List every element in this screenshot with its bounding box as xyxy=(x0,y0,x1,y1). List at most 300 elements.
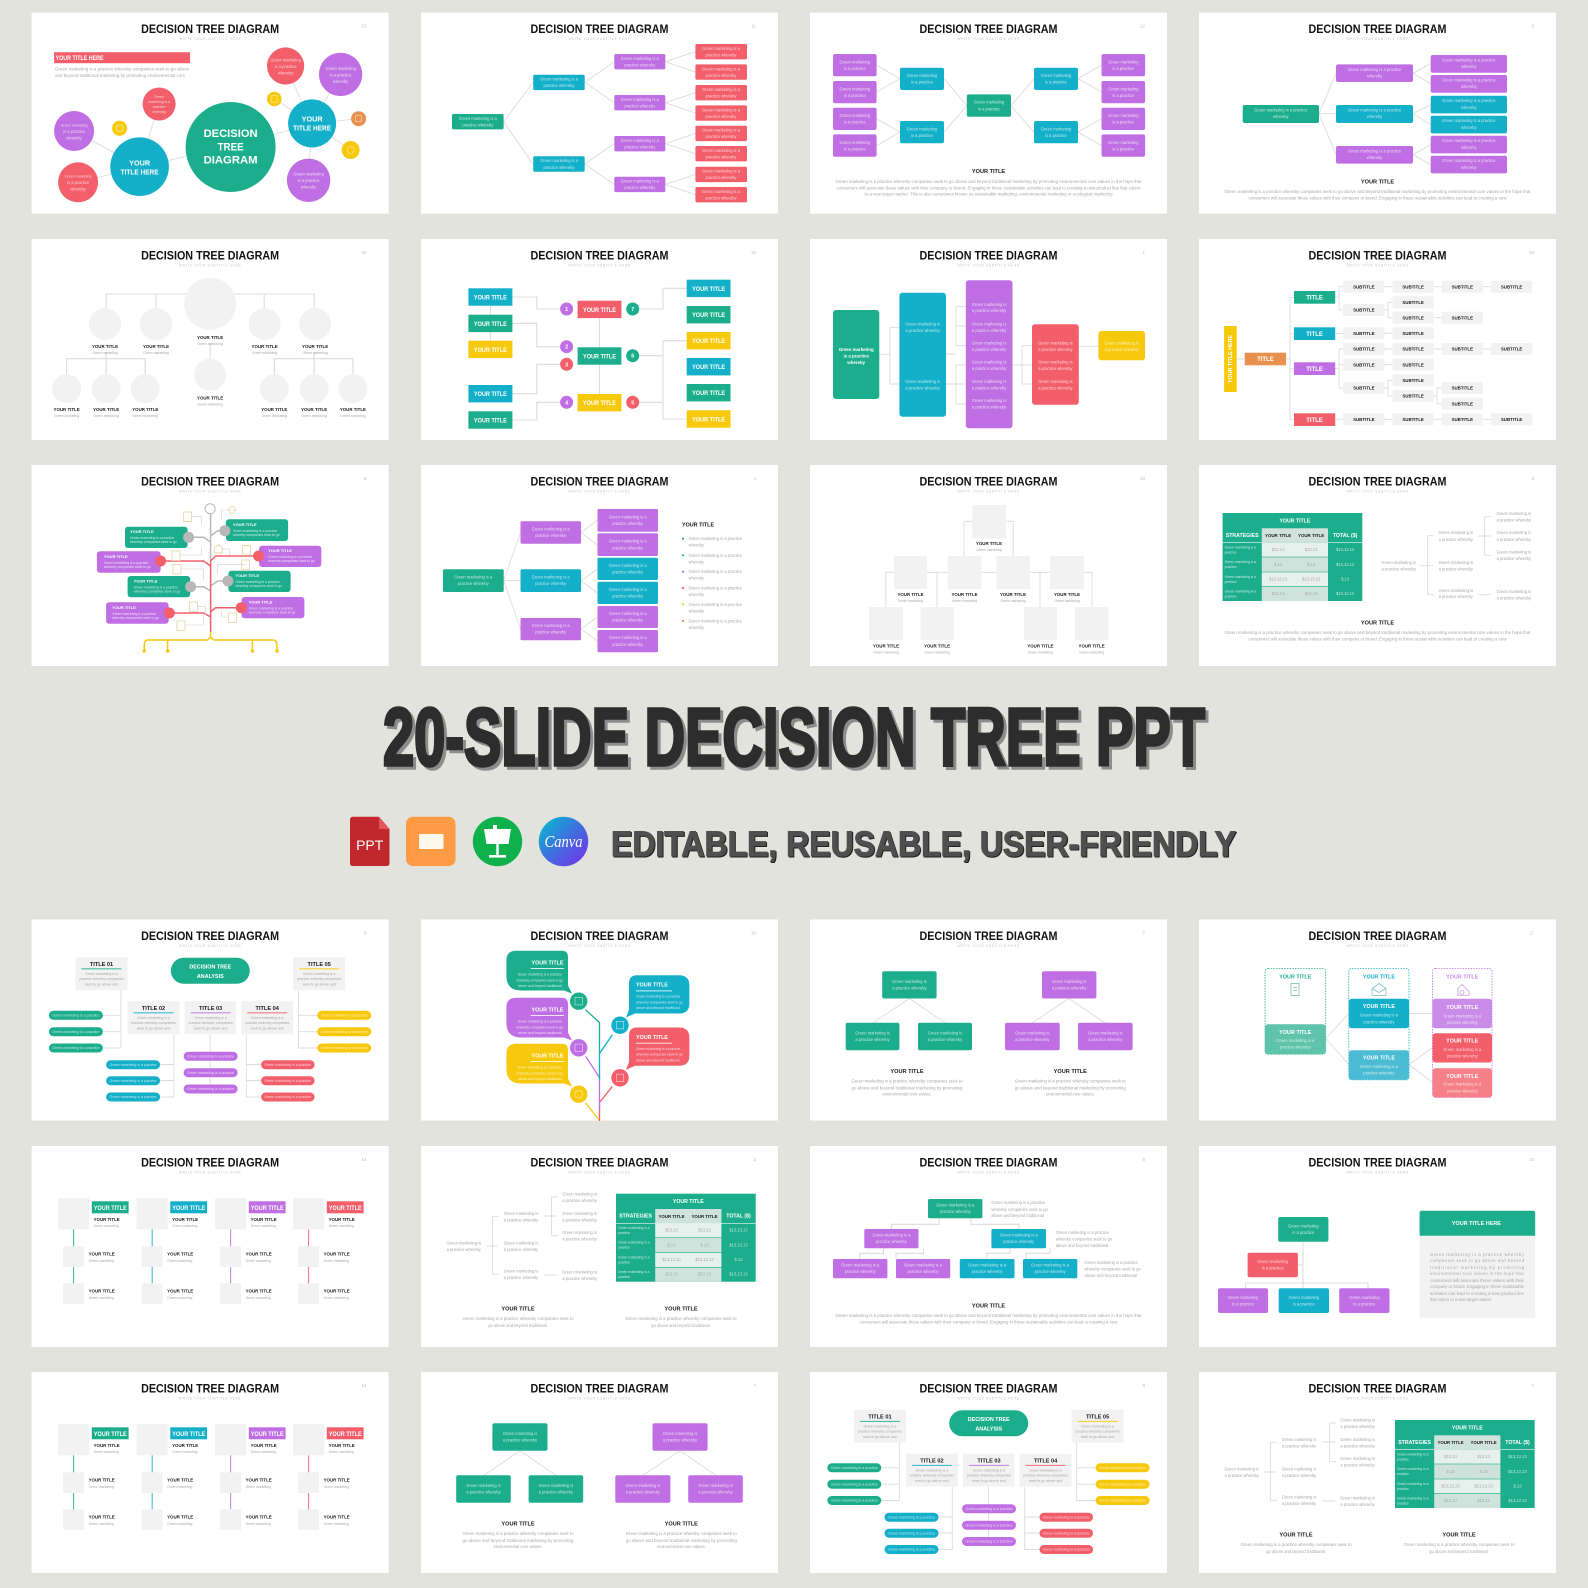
column 4: YOUR TITLE xyxy=(329,1431,362,1438)
nodes: right: Green marketing is a practice xyxy=(1442,158,1496,163)
slide 12: symmetric tree xyxy=(810,13,1167,214)
subtitle grid: SUBTITLE xyxy=(1402,378,1424,383)
table: $13,13.13 xyxy=(695,1257,714,1262)
card: title 03 xyxy=(963,1454,1014,1487)
heading: DECISION TREE DIAGRAM xyxy=(920,930,1058,943)
column 4: YOUR TITLE xyxy=(324,1514,350,1520)
table: $13,13.13 xyxy=(1302,576,1321,582)
nodes: left purple: Green marketing xyxy=(840,140,871,145)
heading: DECISION TREE DIAGRAM xyxy=(920,475,1058,488)
tree text: Green marketing is xyxy=(504,1240,538,1246)
nodes: blue: is a practice xyxy=(1045,133,1068,138)
labels: Green marketing xyxy=(93,414,119,418)
labels: YOUR TITLE xyxy=(340,407,366,412)
tree: green: Green marketing is xyxy=(892,979,927,984)
column 4: YOUR TITLE xyxy=(324,1478,350,1482)
tree: purple xyxy=(1005,971,1133,1050)
nodes: blue: Green marketing xyxy=(1041,126,1072,131)
heading: DECISION TREE DIAGRAM xyxy=(141,23,279,36)
subtitle grid: SUBTITLE xyxy=(1452,417,1473,422)
text block: YOUR TITLE xyxy=(972,169,1005,175)
nodes: is a practice xyxy=(1262,1266,1284,1271)
heading: 9 xyxy=(1142,1383,1145,1388)
slide 18: subtitle tree xyxy=(1199,239,1556,440)
card: title 01: TITLE 01 xyxy=(868,1414,892,1420)
card: green 5: whereby companies seek to go xyxy=(134,590,180,594)
pills: purple: Green marketing is a practice xyxy=(966,1507,1012,1511)
heading xyxy=(1308,930,1534,948)
text block: consumers will associate these values with their company or brand. Engaging in these sustainable activities can lead to creating a new product line that caters xyxy=(836,185,1140,190)
panel: text: consumers will associate these values with their xyxy=(1430,1278,1525,1283)
bubble: green: above and beyond traditional xyxy=(518,984,562,988)
nodes: right: whereby xyxy=(1461,64,1477,69)
tree text xyxy=(1225,1418,1376,1507)
bubble: yellow: whereby companies seek to go xyxy=(516,1071,563,1075)
text block: left: Green marketing is a practice whereby companies seek to xyxy=(462,1531,574,1536)
column 2: YOUR TITLE xyxy=(167,1252,193,1256)
tree trunk and branches xyxy=(144,514,277,650)
block: blue: a practice whereby xyxy=(906,386,941,390)
nodes: purple level: practice whereby xyxy=(624,104,656,109)
circles: root and level nodes xyxy=(52,278,367,403)
card: green 1 xyxy=(125,527,188,548)
bubble: green xyxy=(506,951,572,994)
nodes: right purple: is a practice xyxy=(1112,146,1135,151)
block: purple: Green marketing is xyxy=(972,322,1006,326)
card: purple 8: Green marketing is a practice xyxy=(249,606,293,610)
nodes: right: practice whereby xyxy=(612,545,644,550)
tree text: Green marketing is xyxy=(504,1211,538,1216)
tagline: EDITABLE, REUSABLE, USER-FRIENDLY xyxy=(611,825,1236,864)
connector lines xyxy=(1326,1014,1432,1082)
text block: consumers will associate these values with their company or brand. Engaging in these sustainable activities can lead to creating a new xyxy=(1248,196,1507,201)
labels: YOUR TITLE xyxy=(93,407,119,412)
card: title 04: TITLE 04 xyxy=(256,1006,280,1012)
heading: WRITE YOUR SUBTITLE HERE xyxy=(568,1170,631,1174)
column 4: YOUR TITLE xyxy=(329,1217,355,1222)
card: title 02: seek to go above and xyxy=(915,1479,949,1483)
column 4: YOUR TITLE xyxy=(329,1443,355,1448)
nodes: right: Green marketing is a xyxy=(609,587,647,592)
column 4: YOUR TITLE xyxy=(324,1288,350,1294)
heading: WRITE YOUR SUBTITLE HERE xyxy=(179,37,241,41)
tree: purple: a practice whereby xyxy=(1015,1037,1050,1042)
panel: text: that caters to a new target market. xyxy=(1430,1297,1492,1302)
column 4: Green marketing xyxy=(324,1522,349,1526)
table: YOUR TITLE xyxy=(1265,533,1291,538)
table: Green marketing is a xyxy=(618,1256,650,1260)
table: practice xyxy=(618,1231,630,1235)
boxes: left column xyxy=(468,288,512,429)
tree: purple: Green marketing is xyxy=(698,1483,733,1488)
nodes: middle: Green marketing is a xyxy=(532,623,570,628)
table: Green marketing is a xyxy=(618,1270,650,1274)
heading: DECISION TREE DIAGRAM xyxy=(920,1156,1058,1169)
card: purple 3: YOUR TITLE xyxy=(104,554,128,559)
text block: left xyxy=(852,1069,963,1097)
tree root dots and crown xyxy=(142,504,279,653)
nodes: middle xyxy=(1336,64,1413,164)
nodes: right purple: is a practice xyxy=(1112,66,1135,71)
nodes: Green marketing is a xyxy=(904,1262,943,1268)
heading: 10 xyxy=(751,930,756,936)
bubbles: leaf nodes: is a practice xyxy=(63,129,86,134)
card: green 6: Green marketing is a practice xyxy=(235,580,280,584)
heading xyxy=(141,1382,367,1400)
labels: Green marketing xyxy=(133,414,158,418)
connector lines xyxy=(504,520,598,641)
column 3: Green marketing xyxy=(251,1224,276,1228)
icon: Google Slides xyxy=(406,817,456,866)
table: YOUR TITLE xyxy=(1279,518,1311,524)
connector lines xyxy=(74,66,359,183)
boxes: right column: YOUR TITLE xyxy=(692,286,726,293)
main headline: 20-SLIDE DECISION TREE PPT xyxy=(383,692,1205,783)
text block: right: go above and beyond traditional marketing by promoting xyxy=(626,1538,738,1543)
tree text: a practice whereby xyxy=(1439,594,1474,599)
bubble: central decision tree: TREE xyxy=(218,142,244,154)
table: Green marketing is a xyxy=(1397,1467,1429,1471)
text block: YOUR TITLE xyxy=(1361,180,1394,186)
heading: WRITE YOUR SUBTITLE HERE xyxy=(568,944,631,948)
tree text: a practice whereby xyxy=(504,1275,539,1280)
tree text: Green marketing is xyxy=(447,1240,481,1246)
card: title 05: TITLE 05 xyxy=(308,962,331,968)
bubbles: leaf nodes: Green marketing xyxy=(293,172,325,177)
card: title 04 xyxy=(241,1001,293,1034)
pill: main analysis xyxy=(171,958,250,984)
card: green 5: Green marketing is a practice xyxy=(134,586,178,590)
table: YOUR TITLE xyxy=(1452,1426,1483,1432)
panel: text: company or brand. Engaging in these sustainable xyxy=(1430,1284,1525,1289)
tree text: Green marketing is xyxy=(562,1270,597,1274)
callout: title bar and paragraph: Green marketing is a practice whereby companies seek to go above xyxy=(55,66,190,71)
heading: WRITE YOUR SUBTITLE HERE xyxy=(957,1170,1020,1174)
nodes: blue level: practice whereby xyxy=(544,165,575,170)
tree text xyxy=(1381,511,1532,600)
nodes: red level: practice whereby xyxy=(706,134,737,139)
tree: green: a practice whereby xyxy=(539,1490,574,1495)
title boxes: TITLE xyxy=(1306,367,1323,373)
nodes: red level: practice whereby xyxy=(706,196,737,201)
pills: yellow: Green marketing is a practice xyxy=(321,1014,368,1018)
block: purple: a practice whereby xyxy=(972,386,1007,390)
boxes: center column: YOUR TITLE xyxy=(583,307,617,314)
column: purple and red: practice whereby xyxy=(1447,1054,1479,1059)
block: red: Green marketing is xyxy=(1038,340,1073,346)
nodes: right xyxy=(598,509,658,652)
pill: main analysis: ANALYSIS xyxy=(975,1427,1002,1433)
pills: green xyxy=(49,1011,103,1052)
subtitle grid: SUBTITLE xyxy=(1353,331,1375,336)
numbered circles xyxy=(560,302,639,409)
card: title 02 xyxy=(906,1454,958,1487)
pills: red: Green marketing is a practice xyxy=(1043,1548,1090,1552)
labels: Green marketing xyxy=(924,650,950,654)
tree text: Green marketing is xyxy=(1381,560,1416,565)
tree: purple: Green marketing is xyxy=(626,1483,660,1488)
column 2: YOUR TITLE xyxy=(172,1205,206,1212)
nodes: right: Green marketing is a practice xyxy=(1442,138,1496,143)
heading xyxy=(530,249,756,268)
card: title 01: seek to go above and xyxy=(85,982,118,986)
nodes: red level: Green marketing is a xyxy=(702,189,741,194)
nodes: right: Green marketing is a xyxy=(609,563,647,568)
card: green 2 xyxy=(226,519,288,541)
table xyxy=(1223,513,1362,601)
column 3 xyxy=(215,1198,286,1304)
column: green: YOUR TITLE xyxy=(1279,1030,1312,1036)
pills: purple: Green marketing is a practice xyxy=(966,1540,1012,1544)
tree: green: a practice whereby xyxy=(855,1037,891,1042)
labels: Green marketing xyxy=(873,650,899,654)
tree text: Green marketing is xyxy=(1497,550,1531,554)
labels: YOUR TITLE xyxy=(1000,592,1026,597)
pills: purple: Green marketing is a practice xyxy=(187,1071,234,1075)
tree: green: Green marketing is xyxy=(928,1030,962,1036)
heading: DECISION TREE DIAGRAM xyxy=(530,249,668,262)
tree text: a practice whereby xyxy=(1497,537,1532,542)
card: green 2: whereby companies seek to go xyxy=(233,533,280,537)
text block: Green marketing is a practice whereby companies seek to go above and beyond traditional marketing by promoting environmental core values in the hope that xyxy=(1224,630,1531,635)
pills: yellow xyxy=(317,1011,371,1052)
panel: text: companies seek to go above and beyond xyxy=(1430,1258,1525,1263)
tree text: Green marketing is xyxy=(1439,588,1473,593)
pills: yellow: Green marketing is a practice xyxy=(1099,1466,1146,1470)
bubble: red xyxy=(626,1028,689,1070)
tree text: Green marketing is xyxy=(1340,1456,1375,1461)
nodes: red level: Green marketing is a xyxy=(702,46,741,51)
legend: whereby xyxy=(688,608,705,613)
labels: Green marketing xyxy=(143,351,169,355)
heading xyxy=(1308,23,1534,41)
heading: DECISION TREE DIAGRAM xyxy=(920,1382,1058,1395)
bubble: blue: above and beyond traditional xyxy=(636,1006,680,1010)
tree text: a practice whereby xyxy=(504,1218,539,1222)
connector lines xyxy=(877,65,1102,146)
column: green: YOUR TITLE xyxy=(1279,975,1312,981)
table: Green marketing is a xyxy=(1225,590,1256,594)
table: practice xyxy=(1397,1472,1409,1476)
nodes: purple level: practice whereby xyxy=(624,185,656,190)
block: purple: a practice whereby xyxy=(972,366,1007,371)
boxes: right column: YOUR TITLE xyxy=(692,364,726,371)
nodes: Green marketing xyxy=(1289,1295,1320,1300)
table: Green marketing is a xyxy=(1225,575,1256,579)
table: $13,13.13 xyxy=(1508,1469,1527,1474)
tree text: Green marketing is xyxy=(1340,1496,1375,1500)
connector lines xyxy=(1246,1242,1368,1288)
heading xyxy=(141,930,367,948)
nodes: left purple xyxy=(833,54,877,157)
heading: DECISION TREE DIAGRAM xyxy=(530,475,668,488)
nodes: right purple: Green marketing xyxy=(1108,113,1139,118)
heading: WRITE YOUR SUBTITLE HERE xyxy=(179,490,241,494)
subtitle grid: SUBTITLE xyxy=(1353,284,1375,289)
nodes: middle: practice whereby xyxy=(535,581,567,586)
nodes: blue: Green marketing xyxy=(1041,73,1072,78)
column: purple and red: Green marketing is a xyxy=(1443,1082,1482,1087)
labels: Green marketing xyxy=(54,414,79,418)
heading: DECISION TREE DIAGRAM xyxy=(1308,1382,1446,1395)
image placeholders xyxy=(869,505,1108,640)
nodes: right: practice whereby xyxy=(612,618,644,623)
column 4 xyxy=(293,1424,364,1530)
slide 8: tree with cards xyxy=(32,465,389,666)
node: root: practice whereby xyxy=(462,123,494,128)
tree text: Green marketing is xyxy=(1282,1494,1316,1500)
subtitle grid: SUBTITLE xyxy=(1402,394,1424,399)
nodes: purple level: Green marketing is a xyxy=(621,179,660,184)
tree text: Green marketing is xyxy=(1282,1466,1316,1472)
heading: 13 xyxy=(361,24,367,29)
column 3: YOUR TITLE xyxy=(246,1514,272,1520)
nodes: blue: Green marketing xyxy=(907,73,938,78)
tree text: a practice whereby xyxy=(1382,566,1417,572)
table: practice xyxy=(1397,1502,1409,1506)
heading: 4 xyxy=(753,476,756,481)
title boxes: TITLE xyxy=(1306,296,1323,302)
table: YOUR TITLE xyxy=(673,1199,704,1205)
column 1: YOUR TITLE xyxy=(89,1288,115,1294)
nodes: purple level xyxy=(614,54,665,192)
text block: Green marketing is a practice whereby companies seek to go above and beyond traditional marketing by promoting environmental core values in the hope that xyxy=(1224,189,1531,194)
table: $13,13.13 xyxy=(1508,1454,1527,1459)
labels: YOUR TITLE xyxy=(1054,592,1080,597)
heading xyxy=(530,23,756,41)
block: purple: Green marketing is xyxy=(972,379,1006,384)
text block: left: environmental core values. xyxy=(883,1092,931,1097)
slide 15: tree and text panel xyxy=(1199,1146,1556,1347)
nodes: right: Green marketing is a xyxy=(609,514,647,519)
nodes: right: whereby xyxy=(1461,165,1477,170)
slide 7: twin trees xyxy=(810,920,1167,1120)
bubble: purple: Green marketing is a practice xyxy=(518,1020,562,1024)
column 3: YOUR TITLE xyxy=(246,1252,272,1256)
block: blue xyxy=(899,293,946,417)
card: title 05: practice whereby companies xyxy=(1075,1430,1120,1434)
numbered circles: 1 xyxy=(565,307,568,313)
text block: right xyxy=(1404,1533,1515,1554)
bubbles: leaf nodes: whereby xyxy=(66,136,83,141)
tree text: a practice whereby xyxy=(562,1276,598,1281)
table: $.13 xyxy=(1341,576,1350,582)
card: green 2: Green marketing is a practice xyxy=(233,529,277,533)
nodes: right: whereby xyxy=(1461,125,1477,130)
column 1: Green marketing xyxy=(94,1450,119,1454)
slide 14 repeat: staggered squares xyxy=(32,1372,389,1573)
pills: purple: Green marketing is a practice xyxy=(187,1054,234,1058)
labels: YOUR TITLE xyxy=(261,407,287,412)
heading xyxy=(920,23,1145,41)
tree: purple: a practice whereby xyxy=(1052,986,1087,990)
bubble: central decision tree: DIAGRAM xyxy=(204,155,258,167)
heading: 18 xyxy=(1529,250,1534,255)
heading xyxy=(141,23,367,41)
table: $13.13 xyxy=(698,1272,711,1277)
column 1: YOUR TITLE xyxy=(89,1478,115,1482)
bubble: right title: YOUR xyxy=(302,115,323,124)
card: green 5: YOUR TITLE xyxy=(134,578,158,584)
legend: whereby xyxy=(688,576,705,581)
nodes: right: Green marketing is a xyxy=(609,539,647,544)
bubbles: leaf nodes: whereby xyxy=(333,79,349,84)
nodes: right: practice whereby xyxy=(612,594,644,598)
subtitle grid: SUBTITLE xyxy=(1353,362,1375,367)
card: title 03: practice whereby companies xyxy=(188,1021,233,1025)
column 3: YOUR TITLE xyxy=(246,1478,272,1482)
subtitle grid: SUBTITLE xyxy=(1402,331,1424,336)
table: YOUR TITLE xyxy=(1470,1440,1497,1445)
connector lines xyxy=(879,307,1098,404)
card: green 1: YOUR TITLE xyxy=(130,529,154,534)
text block: right xyxy=(626,1522,738,1549)
heading: WRITE YOUR SUBTITLE HERE xyxy=(957,944,1020,948)
pills: red xyxy=(261,1060,315,1102)
pills: green: Green marketing is a practice xyxy=(52,1046,99,1050)
nodes: blue level: Green marketing is a xyxy=(540,77,579,82)
block: red: a practice whereby xyxy=(1038,347,1074,352)
column 1: YOUR TITLE xyxy=(89,1252,115,1256)
pills: blue: Green marketing is a practice xyxy=(110,1095,157,1099)
table: $13.13 xyxy=(665,1228,678,1233)
bubbles: leaf nodes: is a practice xyxy=(298,178,320,183)
nodes: purple level: Green marketing is a xyxy=(621,97,660,102)
heading: 16 xyxy=(751,250,756,255)
bubble: green: whereby companies seek to go xyxy=(516,978,563,982)
heading: 3 xyxy=(1531,476,1534,481)
side notes: whereby companies seek to go xyxy=(1056,1236,1113,1242)
labels: Green marketing xyxy=(262,414,287,418)
card: title 03: seek to go above and xyxy=(194,1026,227,1030)
nodes xyxy=(1218,1217,1390,1313)
bubbles: leaf nodes: whereby xyxy=(70,187,87,192)
card: title 01: practice whereby companies xyxy=(79,977,124,981)
pills: red: Green marketing is a practice xyxy=(1043,1515,1090,1519)
tree: green: a practice whereby xyxy=(466,1490,502,1495)
text block: right: Green marketing is a practice whereby companies seek to xyxy=(626,1531,738,1536)
pills: green: Green marketing is a practice xyxy=(831,1466,878,1470)
boxes: center column: YOUR TITLE xyxy=(583,354,617,360)
table: $.13 xyxy=(701,1243,709,1248)
bubbles: leaf nodes: marketing is a xyxy=(148,100,170,104)
heading: 12 xyxy=(1140,24,1145,29)
card: green 1: Green marketing is a practice xyxy=(130,536,174,540)
nodes: middle: whereby xyxy=(1367,155,1383,160)
text block: right: Green marketing is a practice whereby companies seek to xyxy=(1015,1079,1127,1084)
bubbles: leaf nodes: practice xyxy=(153,105,165,109)
node: root xyxy=(1243,105,1319,123)
subtitle grid: SUBTITLE xyxy=(1402,362,1424,367)
labels: YOUR TITLE xyxy=(54,407,80,412)
nodes: Green marketing xyxy=(1228,1295,1259,1300)
bubble: purple: above and beyond traditional xyxy=(518,1031,562,1035)
block: blue: Green marketing is xyxy=(905,322,940,326)
nodes: right: Green marketing is a practice xyxy=(1442,118,1496,123)
card: title 05: Green marketing is a xyxy=(303,972,335,976)
card: title 03 xyxy=(185,1001,236,1034)
tree text: a practice whereby xyxy=(1340,1424,1376,1429)
table: $.13 xyxy=(1447,1469,1455,1474)
heading: 14 xyxy=(361,1157,367,1162)
heading: WRITE YOUR SUBTITLE HERE xyxy=(179,264,241,268)
table: YOUR TITLE xyxy=(1437,1440,1464,1445)
heading xyxy=(530,1156,756,1174)
bubble: right title xyxy=(288,99,336,147)
column 2: YOUR TITLE xyxy=(167,1288,193,1294)
title boxes: TITLE xyxy=(1306,418,1323,424)
slide 1: block flow xyxy=(810,239,1167,440)
